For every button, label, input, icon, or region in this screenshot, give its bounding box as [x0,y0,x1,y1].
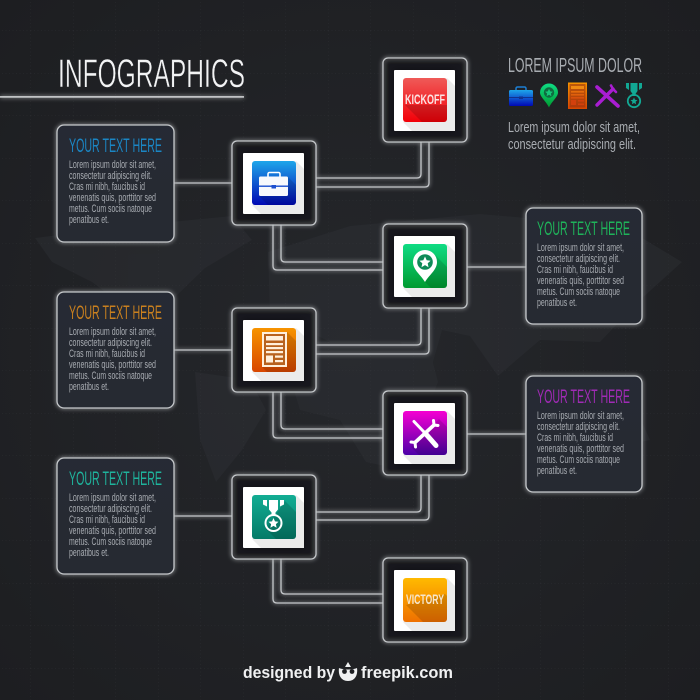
node: medal [232,475,316,559]
connector lines [174,142,526,603]
panel: green text box [526,208,642,324]
panel: purple text box: consectetur adipiscing elit. [537,421,620,433]
icon: medal [263,500,284,531]
panel: blue text box: venenatis quis, porttitor sed [69,192,156,204]
panel: orange text box [57,292,174,408]
panel: purple text box: Lorem ipsum dolor sit amet, [537,410,624,422]
legend icon: briefcase [509,87,533,106]
node: victory: VICTORY [406,592,444,607]
panel: orange text box: metus. Cum sociis natoque [69,370,152,382]
panel: green text box: metus. Cum sociis natoque [537,286,620,298]
panel: green text box: Lorem ipsum dolor sit amet, [537,242,624,254]
panel: teal text box: venenatis quis, porttitor sed [69,525,156,537]
node: briefcase [232,141,316,225]
panel: green text box: Cras mi nibh, faucibus id [537,264,613,276]
panel: orange text box: venenatis quis, porttitor sed [69,359,156,371]
panel: blue text box [57,125,174,242]
icon: document [262,332,287,367]
legend description: consectetur adipiscing elit. [508,136,636,153]
panel: teal text box: Lorem ipsum dolor sit amet, [69,492,156,504]
legend description: Lorem ipsum dolor sit amet, [508,119,640,136]
panel: orange text box: penatibus et. [69,381,109,393]
node: tools [383,391,467,475]
panel: green text box: consectetur adipiscing elit. [537,253,620,265]
title underline [0,96,244,98]
panel: orange text box: consectetur adipiscing elit. [69,337,152,349]
legend icon: map pin [540,84,558,108]
panel: purple text box [526,376,642,492]
legend icon: medal [626,83,642,107]
legend description [508,119,640,153]
panel: purple text box: YOUR TEXT HERE [537,387,630,408]
node: document [232,308,316,392]
world map [35,214,682,482]
panel: teal text box: metus. Cum sociis natoque [69,536,152,548]
panel: teal text box: YOUR TEXT HERE [69,469,162,490]
panel: green text box: penatibus et. [537,297,577,309]
legend icon: crossed tools [597,86,618,106]
panel: orange text box: Cras mi nibh, faucibus id [69,348,145,360]
panel: orange text box: Lorem ipsum dolor sit amet, [69,326,156,338]
panel: purple text box: venenatis quis, porttitor sed [537,443,624,455]
node: kickoff [383,58,467,142]
panel: blue text box: penatibus et. [69,214,109,226]
node: map pin [383,224,467,308]
panel: purple text box: metus. Cum sociis natoque [537,454,620,466]
panel: teal text box: Cras mi nibh, faucibus id [69,514,145,526]
panel: blue text box: Cras mi nibh, faucibus id [69,181,145,193]
panel: blue text box: metus. Cum sociis natoque [69,203,152,215]
panel: green text box: YOUR TEXT HERE [537,219,630,240]
footer credit [243,662,453,682]
panel: green text box: venenatis quis, porttitor sed [537,275,624,287]
panel: teal text box: penatibus et. [69,547,109,559]
icon: crossed tools [411,420,438,447]
icon: briefcase [259,172,288,196]
panel: blue text box: consectetur adipiscing elit. [69,170,152,182]
legend icon: document [568,82,587,109]
panel: purple text box: Cras mi nibh, faucibus id [537,432,613,444]
footer credit: freepik.com [361,664,453,682]
node: kickoff: KICKOFF [405,92,445,107]
node: victory [383,558,467,642]
panel: orange text box: YOUR TEXT HERE [69,303,162,324]
panel: blue text box: YOUR TEXT HERE [69,136,162,157]
footer credit: designed by [243,664,336,682]
panel: purple text box: penatibus et. [537,465,577,477]
icon: map pin [413,250,437,282]
panel: blue text box: Lorem ipsum dolor sit amet, [69,159,156,171]
icon: freepik logo [339,662,357,681]
title: INFOGRAPHICS [58,52,245,96]
panel: teal text box [57,458,174,574]
panel: teal text box: consectetur adipiscing elit. [69,503,152,515]
